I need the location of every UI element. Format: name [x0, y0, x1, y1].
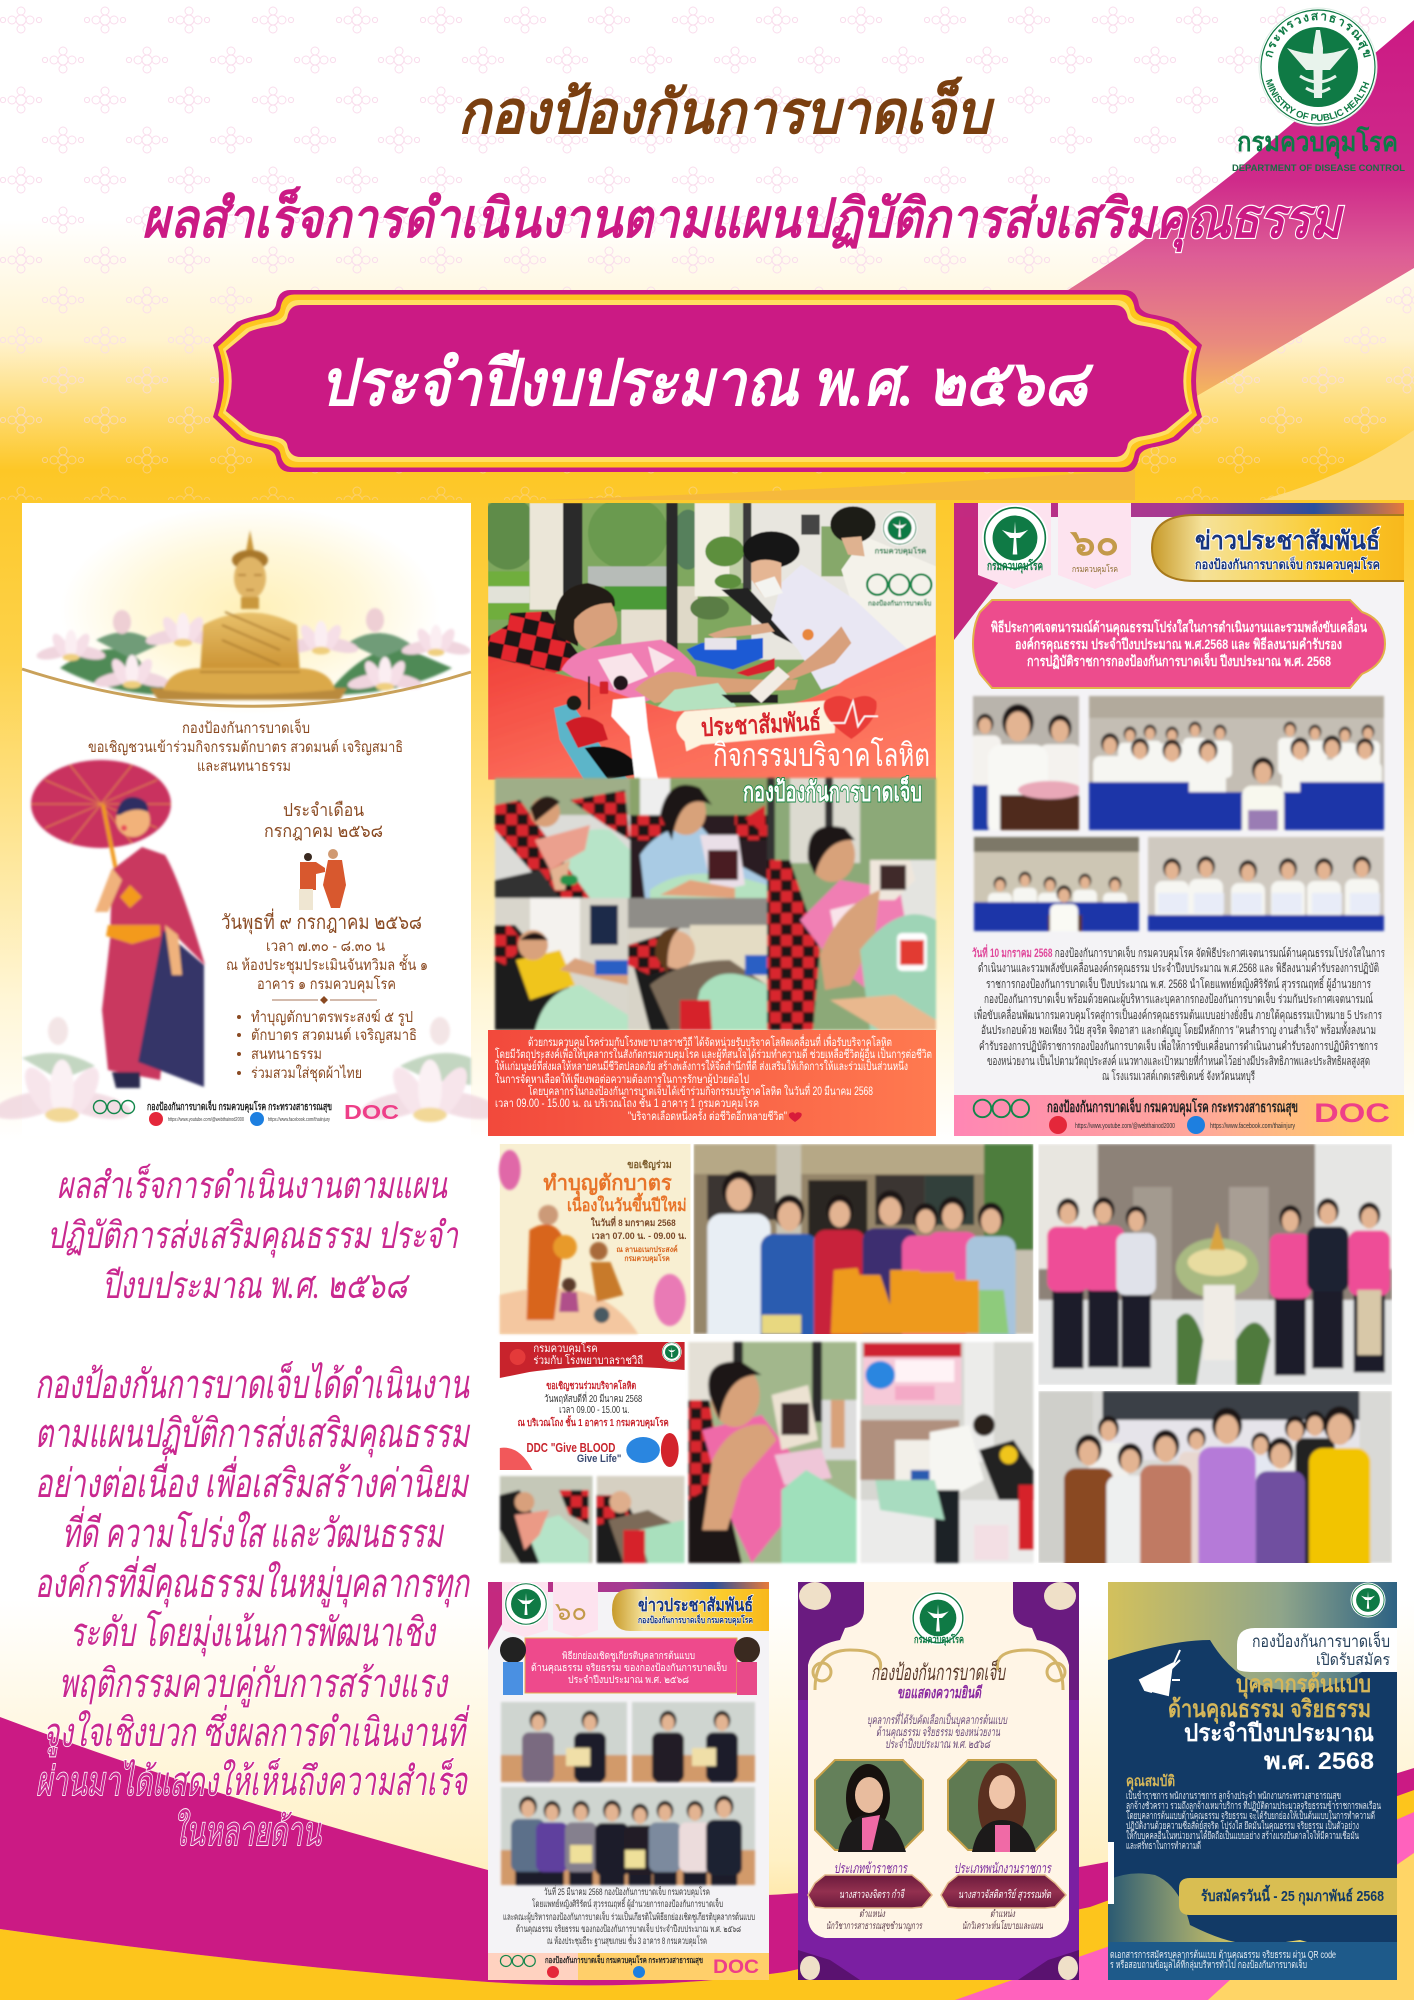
text block: award details: ด้านคุณธรรม จริยธรรม ของกองป้องกันการบาดเจ็บ ประจำปีงบประมาณ พ.ศ. ๒๕๖๘: [516, 1922, 741, 1935]
text block: award details: ณ ห้องประชุมธีระ ฐานสุขเกษม ชั้น 3 อาคาร 8 กรมควบคุมโรค: [547, 1934, 707, 1947]
text: date and venue: ณ ห้องประชุมประเมินจันทวิมล ชั้น ๑: [226, 954, 428, 975]
logos on photo: [867, 510, 931, 608]
portraits: award winners: [815, 1760, 1056, 1852]
text: poster title: ด้านคุณธรรม จริยธรรม: [1168, 1696, 1371, 1725]
text: left column summary: จูงใจเชิงบวก ซึ่งผลการดำเนินงานที่: [43, 1704, 470, 1757]
text block: blood donation details: [488, 1030, 936, 1136]
logos on photo: กรมควบคุมโรค: [875, 546, 926, 556]
footer: poster contact strip: https://www.facebook.com/thaiinjury: [268, 1117, 330, 1123]
text: left column summary: พฤติกรรมควบคู่กับการสร้างแรง: [59, 1661, 449, 1708]
text: date and venue: อาคาร ๑ กรมควบคุมโรค: [257, 975, 396, 994]
flyer: new year alms: ทำบุญตักบาตร: [543, 1172, 673, 1196]
plaques: award winner names: [808, 1875, 1066, 1908]
banner: fiscal year: ประจำปีงบประมาณ พ.ศ. ๒๕๖๘: [320, 348, 1094, 419]
card: open for applications: เปิดรับสมัคร: [1316, 1652, 1390, 1669]
text: date and venue: วันพุธที่ ๙ กรกฎาคม ๒๕๖๘: [221, 908, 422, 935]
logos and press release header: ๖๐: [555, 1596, 587, 1626]
logos on photo: กองป้องกันการบาดเจ็บ: [868, 599, 931, 608]
illustration: golden Buddha with lotus: [35, 530, 472, 700]
list: activities: ร่วมสวมใส่ชุดผ้าไทย: [251, 1064, 362, 1083]
text block: blood donation details: ให้แก่มนุษย์ที่ส่งผลให้หลายคนมีชีวิตปลอดภัย สร้างพลังการให้จิตสำนึกที่ดี ส่งเสริมให้เกิดการให้และร่วมเป็นส่วนหนึ่ง: [495, 1058, 908, 1073]
flyer: invite to donate blood: ร่วมกับ โรงพยาบาลราชวิถี: [533, 1354, 643, 1367]
logos: department and 60th anniversary tabs: กรมควบคุมโรค: [987, 558, 1043, 574]
footer: poster contact strip: https://www.youtube.com/@webthainod2000: [168, 1117, 244, 1123]
panel: role model application poster: [1108, 1582, 1397, 1980]
list: activities: ตักบาตร สวดมนต์ เจริญสมาธิ: [251, 1027, 417, 1044]
logos and press release header: กองป้องกันการบาดเจ็บ กรมควบคุมโรค: [638, 1613, 753, 1626]
photos: small donors: [500, 1342, 1033, 1563]
flyer: new year alms: เวลา 07.00 น. - 09.00 น.: [592, 1231, 687, 1242]
text: congratulations heading: กองป้องกันการบาดเจ็บ: [871, 1659, 1006, 1685]
text block: blood donation details: "บริจาคเลือดหนึ่งครั้ง ต่อชีวิตอีกหลายชีวิต": [628, 1108, 787, 1123]
text: date and venue: [221, 908, 428, 1004]
logo: ministry of public health: กระทรวงสาธารณสุข: [1266, 12, 1371, 58]
speech bubble: public relations: [676, 696, 878, 751]
footer: press release contact strip: [954, 1095, 1404, 1136]
flyer: new year alms: เนื่องในวันขึ้นปีใหม่: [567, 1192, 687, 1215]
flyer: invite to donate blood: ขอเชิญชวนร่วมบริจาคโลหิต: [546, 1379, 636, 1392]
logos: department and 60th anniversary tabs: กรมควบคุมโรค: [1072, 564, 1118, 575]
logo text: department of disease control: กรมควบคุมโรค: [1237, 125, 1398, 159]
text: left column summary: ผ่านมาได้แสดงให้เห็นถึงความสำเร็จ: [36, 1758, 468, 1804]
text: left column summary: องค์กรที่มีคุณธรรมในหมู่บุคลากรทุก: [35, 1555, 470, 1608]
text: qualifications: [1126, 1772, 1381, 1852]
text: congratulations heading: ด้านคุณธรรม จริยธรรม ของหน่วยงาน: [876, 1725, 1001, 1740]
panel: role model award press release: [488, 1582, 769, 1980]
plaque: award title: [500, 1637, 760, 1695]
banner: fiscal year: [213, 290, 1202, 472]
labels: award categories: ประเภทพนักงานราชการ: [954, 1861, 1052, 1877]
text block: blood donation details: โดยมีวัตถุประสงค์เพื่อให้บุคลากรในสังกัดกรมควบคุมโรค และผู้ที่สนใจได้ร่วมทำความดี ช่วยเหลือชีวิตผู้อื่น เป็นการต่อชีวิต: [495, 1046, 932, 1061]
text block: award details: และคณะผู้บริหารกองป้องกันการบาดเจ็บ ร่วมเป็นเกียรติในพิธียกย่องเชิดชูเกียรติบุคลากรต้นแบบ: [503, 1910, 755, 1923]
text block: award details: โดยแพทย์หญิงศิริรัตน์ สุวรรณฤทธิ์ ผู้อำนวยการกองป้องกันการบาดเจ็บ: [532, 1896, 723, 1910]
text: left column summary: ระดับ โดยมุ่งเน้นการพัฒนาเชิง: [70, 1609, 437, 1657]
text: left column heading: ปฏิบัติการส่งเสริมคุณธรรม ประจำ: [47, 1216, 459, 1258]
photos: award recipients: [501, 1702, 755, 1941]
text: invitation: และสนทนาธรรม: [197, 758, 291, 775]
footer: award contact strip: กองป้องกันการบาดเจ็บ กรมควบคุมโรค กระทรวงสาธารณสุข: [545, 1953, 703, 1966]
text block: blood donation details: ในการจัดหาเลือดให้เพียงพอต่อความต้องการในการรักษาผู้ป่วยต่อไป: [495, 1073, 749, 1086]
text: qualifications: และศรัทธาในการทำความดี: [1126, 1840, 1201, 1852]
text block: ceremony details: ณ โรงแรมเวสต์เกตเรสซิเดนซ์ จังหวัดนนทบุรี: [1102, 1069, 1255, 1084]
logos and press release header: ข่าวประชาสัมพันธ์: [638, 1594, 753, 1615]
footer: poster contact strip: DOC: [344, 1102, 399, 1124]
flyer: new year alms: ขอเชิญร่วม: [627, 1159, 672, 1171]
footer: press release contact strip: https://www.facebook.com/thaiinjury: [1210, 1123, 1295, 1130]
photo: donor and nurse: [478, 496, 936, 736]
collage: alms and donation activities: [499, 1144, 1392, 1650]
illustration: alms giving: [299, 849, 346, 910]
text: month: ประจำเดือน: [283, 800, 364, 820]
photos: donors grid: [495, 778, 936, 1030]
text: left column heading: ปีงบประมาณ พ.ศ. ๒๕๖๘: [102, 1266, 410, 1307]
illustration: woman with red umbrella: [31, 760, 205, 1088]
text: positions: นักวิชาการสาธารณสุขชำนาญการ: [826, 1920, 923, 1932]
text: invitation: กองป้องกันการบาดเจ็บ: [182, 718, 310, 737]
text: left column summary: ในหลายด้าน: [173, 1809, 322, 1854]
flyer: new year alms: ในวันที่ 8 มกราคม 2568: [591, 1215, 676, 1229]
logos: department and 60th anniversary tabs: ๖๐: [1069, 522, 1119, 563]
decoration: lower lotus: [0, 1017, 501, 1124]
photo: team at buddha statue: [1038, 1144, 1392, 1385]
header: press release banner: [1152, 515, 1404, 581]
text: left column heading: [47, 1163, 459, 1307]
text: congratulations heading: [867, 1633, 1008, 1751]
text: invitation: [88, 718, 403, 775]
flyer: invite to donate blood: Give Life": [577, 1453, 621, 1465]
text: poster title: บุคลากรต้นแบบ: [1236, 1671, 1371, 1700]
red band: [488, 635, 936, 780]
footer: press release contact strip: DOC: [1314, 1098, 1390, 1128]
text block: blood donation details: ด้วยกรมควบคุมโรคร่วมกับโรงพยาบาลราชวิถี ได้จัดหน่วยรับบริจาคโลหิตเคลื่อนที่ เพื่อรับบริจาคโลหิต: [528, 1034, 892, 1049]
logo text: department of disease control: DEPARTMENT OF DISEASE CONTROL: [1232, 163, 1406, 173]
footer: award contact strip: [488, 1953, 769, 1980]
text: public relations heading: ประชาสัมพันธ์: [700, 707, 822, 742]
text block: blood donation details: โดยบุคลากรในกองป้องกันการบาดเจ็บได้เข้าร่วมกิจกรรมบริจาคโลหิต ในวันที่ 20 มีนาคม 2568: [528, 1083, 873, 1098]
text: poster title: [1168, 1671, 1374, 1775]
panel: blood donation press release: [478, 496, 936, 1136]
flyer: new year alms: ณ ลานอเนกประสงค์: [616, 1245, 678, 1254]
text: left column summary: [35, 1361, 471, 1854]
plaque: award title: ประจำปีงบประมาณ พ.ศ. ๒๕๖๘: [568, 1674, 689, 1686]
text block: award details: [503, 1885, 755, 1947]
text: positions: [826, 1908, 1044, 1932]
labels: award categories: [834, 1861, 1052, 1877]
flyer: invite to donate blood: เวลา 09.00 - 15.00 น.: [559, 1405, 629, 1416]
text: congratulations heading: ประจำปีงบประมาณ พ.ศ. ๒๕๖๘: [885, 1737, 991, 1751]
photo: donor holding blood bag: [686, 1340, 858, 1565]
text: date and venue: เวลา ๗.๓๐ - ๘.๓๐ น: [266, 938, 385, 955]
logos: department and 60th anniversary tabs: [978, 503, 1131, 589]
plaques: award winner names: นางสาวจงจิตรา กำจี: [839, 1888, 905, 1901]
logo text: department of disease control: [1232, 125, 1406, 173]
callout: application deadline: [1179, 1878, 1397, 1915]
logo: ministry of public health: MINISTRY OF PUBLIC HEALTH: [1266, 78, 1370, 122]
text block: award details: วันที่ 25 มีนาคม 2568 กองป้องกันการบาดเจ็บ กรมควบคุมโรค: [544, 1885, 710, 1898]
plaque: award title: พิธียกย่องเชิดชูเกียรติบุคลากรต้นแบบ: [562, 1650, 695, 1662]
text: poster title: ประจำปีงบประมาณ: [1184, 1720, 1374, 1747]
text: congratulations heading: กรมควบคุมโรค: [914, 1633, 964, 1646]
text: positions: ตำแหน่ง: [990, 1908, 1016, 1920]
flyer: invite to donate blood: [500, 1342, 685, 1470]
footer: press release contact strip: https://www.youtube.com/@webthainod2000: [1075, 1123, 1175, 1130]
panel: integrity declaration press release: [954, 503, 1404, 1136]
photo: blood donation room: [858, 1340, 1036, 1565]
text: left column heading: ผลสำเร็จการดำเนินงานตามแผน: [57, 1163, 448, 1207]
photo: alms team with gifts: [694, 1144, 1034, 1334]
footer: poster contact strip: [94, 1099, 399, 1126]
footer: award contact strip: DOC: [713, 1957, 759, 1978]
list: activities: สนทนาธรรม: [251, 1046, 322, 1063]
header: press release banner: ข่าวประชาสัมพันธ์: [1195, 526, 1380, 555]
text: congratulations heading: บุคลากรที่ได้รับคัดเลือกเป็นบุคลากรต้นแบบ: [867, 1711, 1008, 1728]
plaque: ceremony title: การปฏิบัติราชการกองป้องกันการบาดเจ็บ ปีงบประมาณ พ.ศ. 2568: [1027, 652, 1331, 670]
plaque: award title: ด้านคุณธรรม จริยธรรม ของกองป้องกันการบาดเจ็บ: [531, 1660, 727, 1674]
panel: congratulations card: [798, 1582, 1079, 1980]
text: left column summary: ที่ดี ความโปร่งใส และวัฒนธรรม: [62, 1505, 445, 1556]
panel: merit-making invitation poster: [0, 503, 501, 1136]
footer: poster contact strip: กองป้องกันการบาดเจ็บ กรมควบคุมโรค กระทรวงสาธารณสุข: [147, 1099, 332, 1113]
labels: award categories: ประเภทข้าราชการ: [834, 1861, 908, 1877]
flyer: invite to donate blood: DDC "Give BLOOD: [527, 1440, 615, 1455]
text block: blood donation details: เวลา 09.00 - 15.00 น. ณ บริเวณโถง ชั้น 1 อาคาร 1 กรมควบคุมโรค: [495, 1095, 759, 1110]
icon: megaphone: [1140, 1650, 1180, 1695]
text: congratulations heading: ขอแสดงความยินดี: [897, 1684, 983, 1702]
logo: department, poster: [1350, 1582, 1386, 1618]
illustration: blood donation: [554, 676, 658, 786]
header: press release banner: กองป้องกันการบาดเจ็บ กรมควบคุมโรค: [1195, 555, 1380, 573]
card: open for applications: กองป้องกันการบาดเจ็บ: [1252, 1630, 1390, 1651]
list: activities: [237, 1009, 417, 1083]
flyer: new year alms: กรมควบคุมโรค: [624, 1253, 670, 1264]
footer: QR instructions: ร หรือสอบถามข้อมูลได้ที่กลุ่มบริหารทั่วไป กองป้องกันการบาดเจ็บ: [1110, 1957, 1307, 1971]
photo: executive group: [1038, 1391, 1392, 1563]
ornaments: gold scroll: [813, 1650, 1065, 1690]
bottom wave background: [0, 1717, 1414, 2000]
text: left column summary: กองป้องกันการบาดเจ็บได้ดำเนินงาน: [35, 1361, 470, 1407]
footer: QR instructions: [1108, 1942, 1397, 1980]
flyer: new year alms: [499, 1144, 691, 1334]
flyer: invite to donate blood: วันพฤหัสบดีที่ 20 มีนาคม 2568: [544, 1391, 642, 1405]
text: poster title: พ.ศ. 2568: [1264, 1748, 1374, 1775]
logo: ministry of public health: [1258, 8, 1378, 126]
text: invitation: ขอเชิญชวนเข้าร่วมกิจกรรมตักบาตร สวดมนต์ เจริญสมาธิ: [88, 739, 403, 756]
plaque: ceremony title: [973, 600, 1385, 688]
text: title on photos: กองป้องกันการบาดเจ็บ: [743, 774, 922, 807]
flyer: invite to donate blood: ณ บริเวณโถง ชั้น 1 อาคาร 1 กรมควบคุมโรค: [518, 1415, 669, 1429]
text: month: กรกฎาคม ๒๕๖๘: [264, 821, 383, 841]
text: left column summary: อย่างต่อเนื่อง เพื่อเสริมสร้างค่านิยม: [35, 1455, 470, 1506]
card: open for applications: [1237, 1628, 1397, 1672]
text: qualifications: คุณสมบัติ: [1126, 1772, 1175, 1791]
text: blood donation activity: กิจกรรมบริจาคโลหิต: [713, 737, 930, 773]
text: month: [264, 800, 383, 841]
text: positions: นักวิเคราะห์นโยบายและแผน: [962, 1920, 1044, 1932]
title: division name: กองป้องกันการบาดเจ็บ: [458, 76, 995, 146]
list: activities: ทำบุญตักบาตรพระสงฆ์ ๕ รูป: [251, 1009, 413, 1027]
photos: ceremony: [969, 696, 1384, 948]
flyer: invite to donate blood: กรมควบคุมโรค: [533, 1342, 598, 1355]
plaques: award winner names: นางสาวจัสติตาริย์ สุวรรณทัต: [958, 1888, 1052, 1901]
text block: ceremony details: [972, 944, 1385, 1084]
text: left column summary: ตามแผนปฏิบัติการส่งเสริมคุณธรรม: [35, 1411, 471, 1458]
logos and press release header: [502, 1582, 769, 1637]
text: positions: ตำแหน่ง: [859, 1908, 886, 1920]
